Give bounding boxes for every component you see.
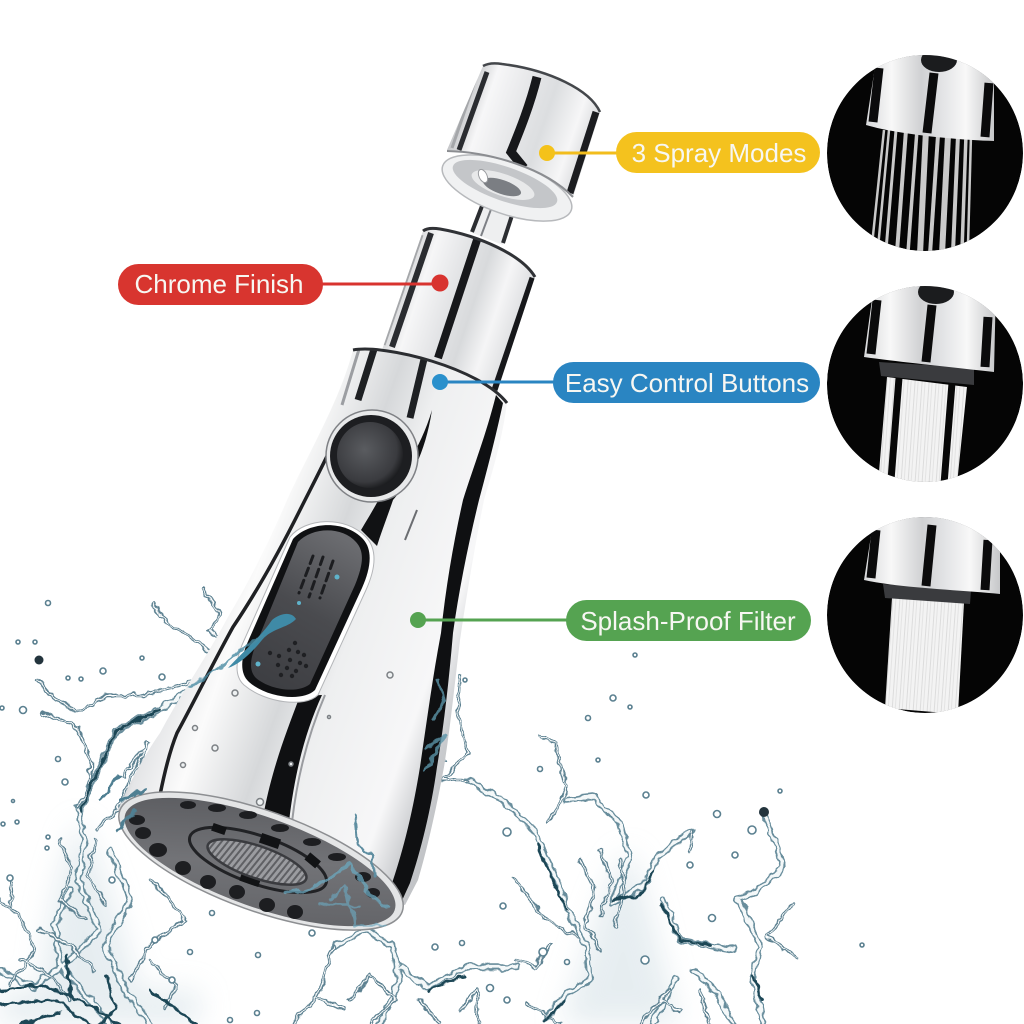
callout: 3 Spray Modes xyxy=(539,132,820,173)
body top edge xyxy=(353,349,507,403)
outer nozzles xyxy=(129,801,380,919)
body water droplets xyxy=(180,672,393,806)
inner ring xyxy=(182,814,334,906)
separated spray streams xyxy=(872,130,971,254)
callout: Chrome Finish xyxy=(118,264,448,305)
sliver highlight xyxy=(405,510,417,540)
faucet head product xyxy=(103,63,600,959)
upper collar xyxy=(382,228,535,392)
main tapered body xyxy=(118,346,507,905)
water on panel xyxy=(228,614,296,668)
callout: Chrome Finish: Chrome Finish xyxy=(134,269,304,299)
top aerator cap xyxy=(447,63,600,197)
soft water sheet xyxy=(0,820,680,1024)
grip dashes xyxy=(299,556,333,598)
filter bar xyxy=(883,584,971,604)
upper groove xyxy=(361,410,432,546)
water droplets xyxy=(0,600,864,1022)
chrome head xyxy=(864,285,996,372)
aerator flange xyxy=(434,141,580,235)
water sheet xyxy=(878,377,967,484)
inset: stream spray mode xyxy=(827,280,1023,484)
spray face xyxy=(103,763,419,959)
water splash over faucet xyxy=(100,636,445,925)
callout: Easy Control Buttons: Easy Control Buttons xyxy=(565,368,809,398)
center filter screen xyxy=(203,830,311,894)
left seam line xyxy=(160,450,330,795)
body details clipped to silhouette xyxy=(160,346,503,905)
chrome head xyxy=(866,54,994,141)
splash threads xyxy=(0,590,797,1024)
grip dots xyxy=(268,641,308,678)
inset: shower spray mode xyxy=(827,48,1023,254)
inset: sheet spray mode xyxy=(827,517,1023,714)
callout: Splash-Proof Filter xyxy=(410,600,811,641)
callout: 3 Spray Modes: 3 Spray Modes xyxy=(632,138,806,168)
swivel neck xyxy=(470,190,518,245)
trigger button panel xyxy=(228,522,374,702)
lower center band xyxy=(264,695,322,822)
large dark droplets xyxy=(34,656,769,817)
round control button xyxy=(326,410,418,502)
right dark band xyxy=(388,395,503,905)
ring highlights xyxy=(358,346,425,418)
callout: Easy Control Buttons xyxy=(432,362,820,403)
filter bar xyxy=(879,362,974,385)
water splash xyxy=(0,590,864,1024)
water sheet xyxy=(885,598,964,714)
callout: Splash-Proof Filter: Splash-Proof Filter xyxy=(580,606,796,636)
chrome head xyxy=(864,517,1000,594)
